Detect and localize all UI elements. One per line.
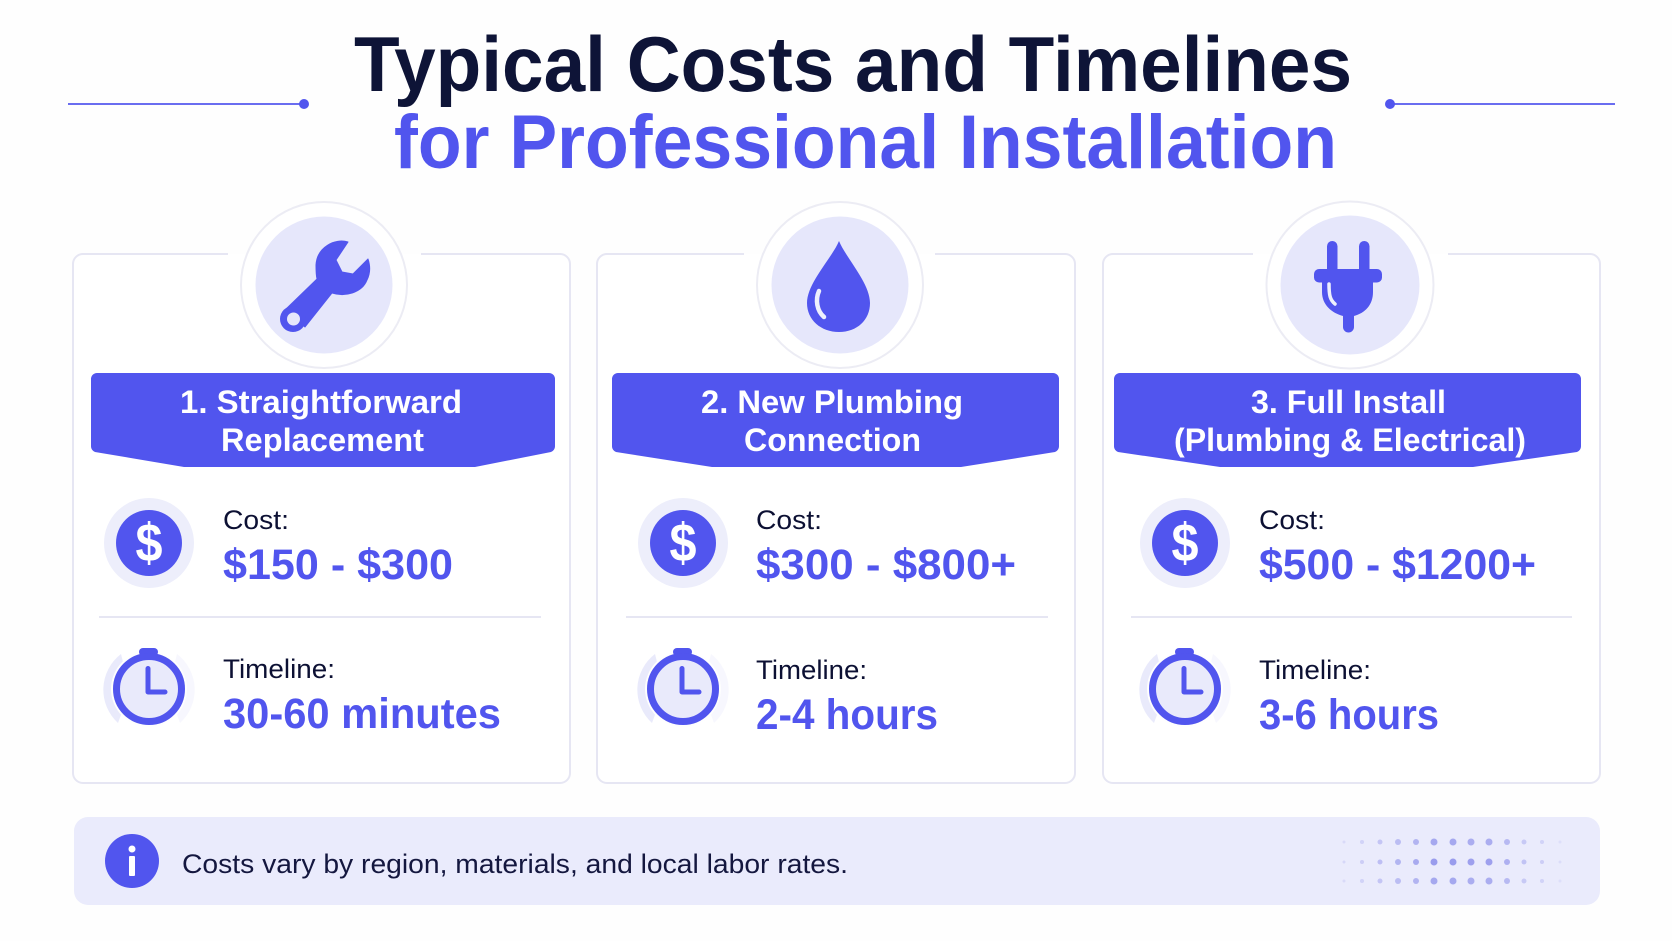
footer text: Costs vary by region, materials, and local labor rates. xyxy=(182,849,848,879)
panel: new plumbing connection xyxy=(597,202,1075,783)
icon: dollar xyxy=(1140,498,1230,588)
icon: clock xyxy=(637,648,729,727)
icon: clock xyxy=(1139,648,1231,727)
cost block: $500 - $1200+ xyxy=(1259,541,1536,589)
timeline block: Timeline: xyxy=(756,655,867,685)
title: for Professional Installation xyxy=(394,100,1337,185)
banner: step 3: 3. Full Install xyxy=(1251,384,1446,420)
title: Typical Costs and Timelines xyxy=(354,20,1352,108)
icon: water drop xyxy=(757,202,923,368)
cost block: Cost: xyxy=(1259,505,1325,535)
right title rule xyxy=(1385,99,1615,109)
cost block xyxy=(223,505,453,589)
timeline block xyxy=(223,654,501,738)
banner: step 1: Replacement xyxy=(221,422,424,458)
banner: step 3: (Plumbing & Electrical) xyxy=(1174,422,1526,458)
cost block: $150 - $300 xyxy=(223,541,453,589)
panel: straightforward replacement xyxy=(73,202,570,783)
icon: wrench xyxy=(241,202,407,368)
cost block xyxy=(1259,505,1536,589)
timeline block: 2-4 hours xyxy=(756,691,938,739)
timeline block xyxy=(1259,655,1439,739)
panel: full install xyxy=(1103,202,1600,783)
banner: step 2: Connection xyxy=(744,422,921,458)
icon: dollar: $ xyxy=(1172,513,1198,573)
cost block: Cost: xyxy=(756,505,822,535)
banner: step 2 xyxy=(612,373,1059,467)
icon: dollar: $ xyxy=(670,513,696,573)
icon: plug xyxy=(1266,202,1434,368)
cost block: Cost: xyxy=(223,505,289,535)
timeline block: Timeline: xyxy=(1259,655,1371,685)
icon: info xyxy=(105,834,159,888)
dot pattern xyxy=(1342,838,1562,884)
icon: dollar xyxy=(638,498,728,588)
icon: clock xyxy=(103,648,195,727)
banner: step 1 xyxy=(91,373,555,467)
banner: step 2: 2. New Plumbing xyxy=(701,384,963,420)
cost block: $300 - $800+ xyxy=(756,541,1016,589)
timeline block: 30-60 minutes xyxy=(223,690,501,738)
banner: step 1: 1. Straightforward xyxy=(180,384,462,420)
left title rule xyxy=(68,99,309,109)
footer note xyxy=(74,817,1600,905)
title xyxy=(354,20,1352,185)
icon: dollar: $ xyxy=(136,513,162,573)
icon: dollar xyxy=(104,498,194,588)
timeline block: 3-6 hours xyxy=(1259,691,1439,739)
cost block xyxy=(756,505,1016,589)
timeline block: Timeline: xyxy=(223,654,335,684)
timeline block xyxy=(756,655,938,739)
banner: step 3 xyxy=(1114,373,1581,467)
